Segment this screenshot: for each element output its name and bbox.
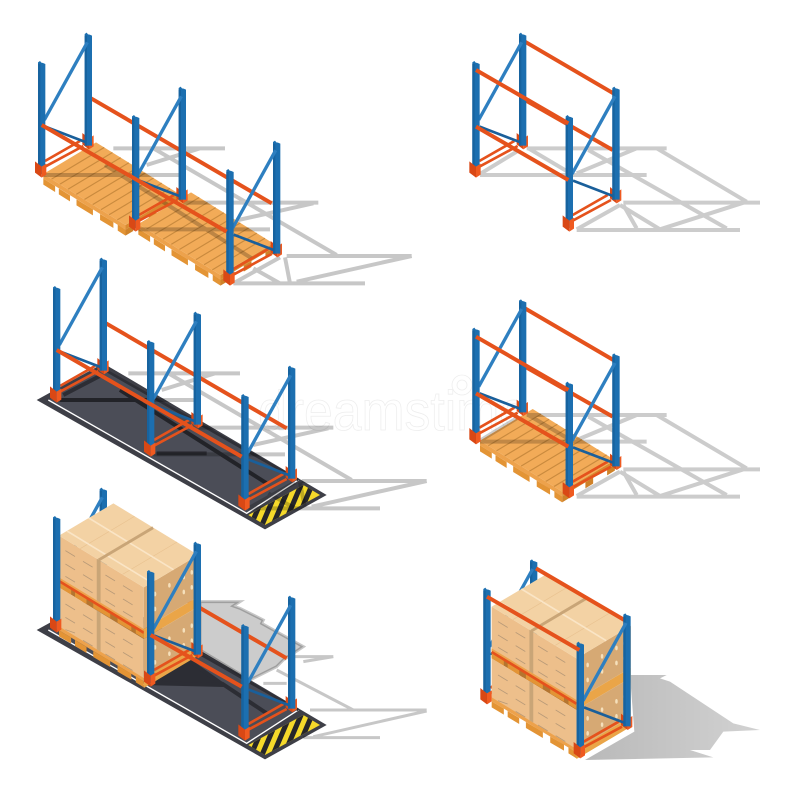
frame: right [223,141,282,286]
pallet: near end [43,142,178,236]
front beams [476,70,568,180]
back beam [91,98,272,203]
floor with hazard stripes [37,593,327,767]
frame: right [238,366,297,511]
cast shadow [200,602,427,738]
front beam [151,635,242,687]
frame: left rear [490,559,539,693]
front beams [476,337,568,447]
cast shadow [480,415,760,497]
frame: left [50,258,109,403]
frame: left rear [59,488,109,622]
box stacks on pallets [59,503,198,688]
frame: left [469,299,528,444]
back beam over stacks [536,568,624,620]
pallet: far end [138,192,273,286]
back beam [106,553,287,658]
frame: right [563,87,621,232]
frame: left [35,33,94,178]
back beams [525,42,613,150]
front left post [480,588,492,704]
frame: right [238,596,297,741]
front beam [57,350,242,457]
front top beam [487,597,579,650]
floor with hazard stripes [37,363,327,537]
cast shadow [43,148,412,283]
panel: empty single bay rack [469,33,760,232]
back beam [106,323,287,428]
frame: right [563,353,621,498]
floor shadows [60,375,267,483]
front beam [42,125,227,232]
panel: single bay rack with box stacks [480,559,760,760]
panel: long rack with two pallets [35,33,412,286]
front left post [50,516,61,633]
panel: long rack with box stacks [37,488,427,767]
frame: middle [144,312,203,457]
watermark: dreamstime [258,379,528,442]
back beams [525,308,613,417]
frame: middle [129,87,188,232]
panel: single bay rack with pallet [469,299,760,502]
cast shadow [585,675,760,760]
frame: right [574,613,632,758]
cast shadow [480,148,760,230]
frame: middle [144,542,203,687]
box stacks on pallets [492,574,631,759]
cast shadow [58,373,427,508]
pallet [480,409,615,502]
frame: left [469,33,528,178]
floor shadows [157,657,267,713]
panel: long rack on floor marking [37,258,427,537]
